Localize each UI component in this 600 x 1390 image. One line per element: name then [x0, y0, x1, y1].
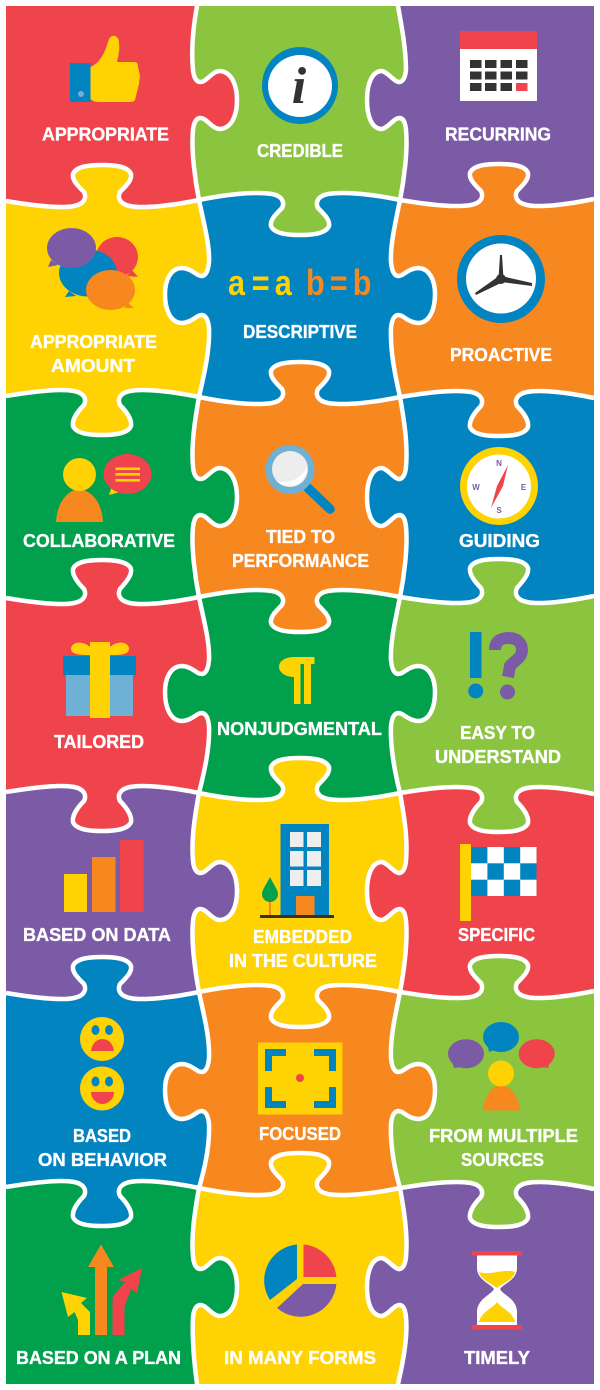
panel: collaborative [23, 454, 175, 551]
icon: diverging arrows [62, 1244, 142, 1335]
icon: compass: S [496, 506, 502, 515]
piece: tailored (red) [6, 560, 250, 838]
label: IN THE CULTURE [229, 951, 377, 971]
label: EASY TO [460, 723, 535, 743]
icon: information: i [292, 58, 307, 115]
piece: credible (lime) [194, 6, 404, 233]
panel: proactive [450, 235, 552, 365]
panel: based on data [23, 840, 171, 945]
piece: appropriate (red) [6, 6, 256, 246]
puzzle: left column pieces [6, 6, 256, 1384]
icon: bar chart [64, 840, 144, 912]
label: EMBEDDED [253, 927, 352, 947]
icon: compass: W [472, 483, 480, 492]
panel: guiding [459, 447, 540, 551]
icon: checkered flag [460, 844, 536, 921]
piece: recurring (purple) [350, 6, 594, 246]
panel: tied to performance [232, 445, 369, 571]
label: COLLABORATIVE [23, 531, 175, 551]
label: NONJUDGMENTAL [217, 719, 382, 739]
panel: focused [258, 1042, 342, 1144]
panel: appropriate [42, 36, 169, 144]
puzzle: right column pieces [350, 6, 594, 1384]
icon: person with three speech bubbles [448, 1022, 555, 1110]
label: BASED [73, 1126, 131, 1146]
label: IN MANY FORMS [224, 1348, 376, 1368]
label: RECURRING [445, 124, 551, 144]
icon: compass: E [521, 483, 527, 492]
icon: clock [457, 235, 545, 323]
panel: timely [464, 1251, 530, 1368]
piece: embedded in the culture (yellow) [194, 760, 404, 1025]
icon: a=a b=b: a=a [228, 264, 292, 304]
icon: pilcrow [279, 657, 314, 704]
icon: hourglass [472, 1251, 522, 1330]
panel: credible [257, 47, 343, 161]
label: APPROPRIATE [30, 332, 157, 352]
piece: collaborative (green) [6, 390, 250, 642]
piece: based on behavior (blue) [6, 957, 250, 1233]
piece: from multiple sources (lime) [350, 956, 594, 1233]
icon: magnifying glass [266, 445, 330, 509]
panel: easy to understand [435, 632, 561, 767]
panel: from multiple sources [429, 1022, 578, 1170]
icon: pie chart [264, 1244, 336, 1317]
panel: embedded in the culture [229, 824, 377, 971]
label: TIMELY [464, 1348, 530, 1368]
label: PROACTIVE [450, 345, 552, 365]
label: TIED TO [266, 527, 335, 547]
label: UNDERSTAND [435, 747, 561, 767]
icon: thumbs up [70, 36, 140, 102]
label: FROM MULTIPLE [429, 1126, 578, 1146]
icon: a=a b=b [228, 264, 371, 304]
piece: in many forms (yellow) [194, 1155, 404, 1384]
panel: in many forms [224, 1244, 376, 1368]
label: ON BEHAVIOR [38, 1150, 167, 1170]
icon: sad and happy faces [80, 1017, 124, 1110]
piece: tied to performance (orange) [194, 364, 404, 630]
icon: gift box [63, 642, 136, 718]
piece: focused (orange) [167, 987, 433, 1193]
piece: based on data (purple) [6, 786, 250, 1037]
icon: a=a b=b: b=b [306, 264, 371, 304]
label: SPECIFIC [458, 925, 535, 945]
panel: appropriate amount [30, 228, 157, 376]
label: APPROPRIATE [42, 124, 169, 144]
label: BASED ON DATA [23, 925, 171, 945]
icon: compass [460, 447, 538, 525]
label: BASED ON A PLAN [16, 1348, 181, 1368]
piece: easy to understand (lime) [350, 559, 594, 838]
label: TAILORED [54, 732, 144, 752]
icon: exclamation and question marks [468, 632, 522, 700]
label: DESCRIPTIVE [243, 322, 357, 342]
label: FOCUSED [259, 1124, 341, 1144]
icon: office building and tree [260, 824, 334, 918]
panel: tailored [54, 642, 144, 752]
panel: based on behavior [38, 1017, 167, 1170]
piece: based on a plan (green) [6, 1181, 250, 1384]
piece: specific (red) [350, 787, 594, 1037]
piece: proactive (orange) [350, 164, 594, 442]
piece: guiding (blue) [350, 391, 594, 642]
icon: calendar [460, 31, 537, 101]
panel: nonjudgmental [217, 657, 382, 739]
label: PERFORMANCE [232, 551, 369, 571]
label: GUIDING [459, 531, 540, 551]
piece: nonjudgmental (green) [167, 592, 433, 798]
panel: based on a plan [16, 1244, 181, 1368]
icon: speech bubbles [47, 228, 138, 310]
label: AMOUNT [51, 356, 135, 376]
icon: person speaking [56, 454, 152, 522]
piece: appropriate amount (yellow) [6, 165, 250, 442]
label: CREDIBLE [257, 141, 343, 161]
icon: compass: N [496, 459, 502, 468]
panel: descriptive [228, 264, 371, 342]
piece: timely (purple) [350, 1182, 594, 1384]
panel: recurring [445, 31, 551, 144]
puzzle: centre column pieces [167, 6, 433, 1384]
piece: descriptive (blue) [167, 195, 433, 402]
panel: specific [458, 844, 536, 945]
label: SOURCES [461, 1150, 544, 1170]
icon: focus frame [258, 1042, 342, 1114]
